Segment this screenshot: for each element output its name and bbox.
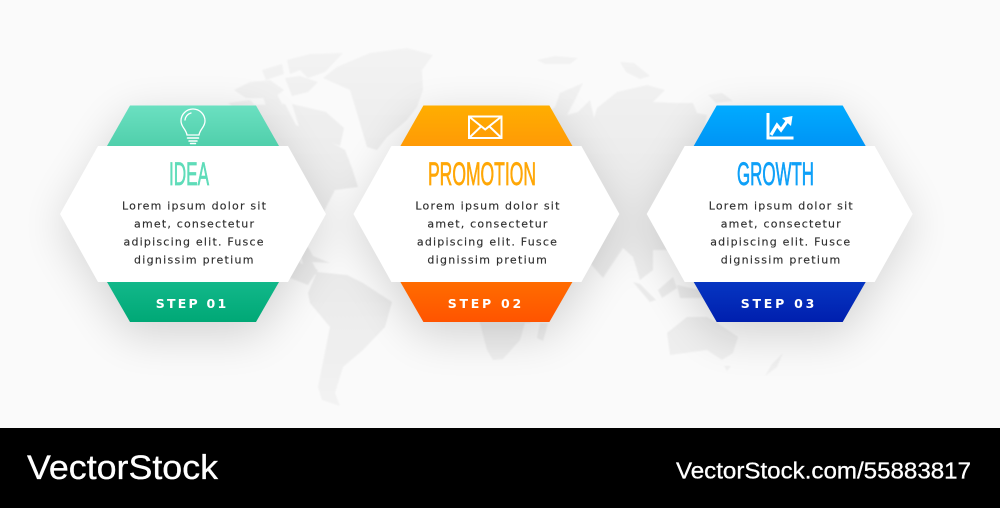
title: growth: GROWTH (737, 156, 814, 192)
map: greenland (323, 48, 433, 150)
map: north america (240, 104, 358, 285)
map: new zealand (765, 353, 783, 376)
map: south america (308, 272, 392, 406)
footer bar (0, 428, 1000, 508)
body text 1: Lorem ipsum dolor sit (122, 200, 267, 212)
body text 2: amet, consectetur (427, 218, 548, 230)
title: promotion: PROMOTION (428, 156, 536, 192)
top band blue (694, 106, 866, 146)
body text 1: adipiscing elit. Fusce (124, 236, 264, 248)
label: step 01: STEP 01 (156, 296, 226, 311)
footer url: VectorStock.com/55883817 (676, 458, 971, 484)
panel: step 3 growth (647, 106, 913, 322)
icon: growth chart (768, 113, 794, 138)
top band orange (400, 106, 572, 146)
title: idea: IDEA (169, 156, 209, 192)
icon: light bulb (181, 109, 205, 144)
label: step 02: STEP 02 (448, 296, 521, 311)
top band green (107, 106, 279, 146)
body text 1: amet, consectetur (134, 218, 254, 230)
map: south east asia (633, 277, 706, 302)
bottom band blue (694, 282, 866, 322)
bottom band orange (400, 282, 572, 322)
body text 3: Lorem ipsum dolor sit (709, 200, 853, 212)
world map (228, 48, 783, 406)
body text 3 (709, 200, 853, 266)
white hexagon (353, 146, 619, 282)
map: central america (300, 247, 330, 276)
body text 1: dignissim pretium (134, 254, 254, 266)
body text 2: Lorem ipsum dolor sit (415, 200, 560, 212)
body text 2: dignissim pretium (427, 254, 547, 266)
map: canadian islands (228, 53, 344, 146)
body text 3: amet, consectetur (721, 218, 841, 230)
body text 1 (122, 200, 267, 266)
panel: step 1 idea (60, 106, 326, 322)
white hexagon (647, 146, 913, 282)
map: arctic islands (537, 56, 733, 103)
bottom band green (107, 282, 279, 322)
hexagon shadows (60, 116, 913, 336)
body text 2 (415, 200, 560, 266)
label: step 03: STEP 03 (741, 296, 814, 311)
map: tasmania (724, 366, 731, 371)
white hexagon (60, 146, 326, 282)
body text 3: adipiscing elit. Fusce (710, 236, 850, 248)
map: madagascar (537, 323, 548, 341)
body text 3: dignissim pretium (721, 254, 840, 266)
icon: envelope (469, 116, 502, 138)
body text 2: adipiscing elit. Fusce (417, 236, 557, 248)
panel: step 2 promotion (353, 106, 619, 322)
map: eurasia and africa (470, 83, 707, 360)
map: australia (667, 317, 738, 360)
footer logo: VectorStock (27, 449, 219, 487)
